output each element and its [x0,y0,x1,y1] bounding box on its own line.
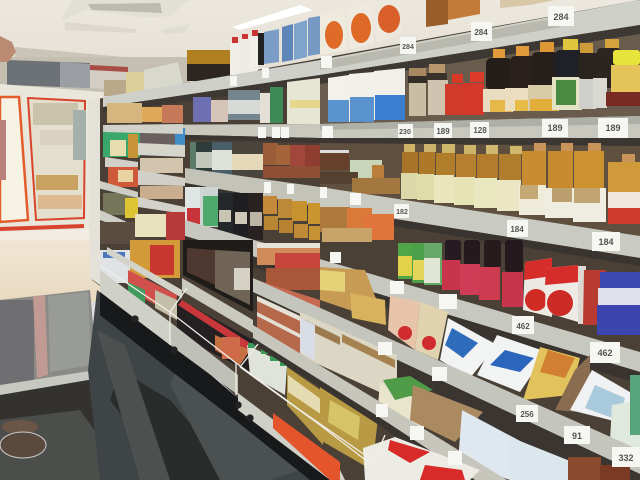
price labels: 230 [399,129,411,136]
wire baskets [100,265,385,465]
price labels: 284 [553,12,569,22]
rice bags [363,437,480,480]
price labels: 189 [547,123,563,133]
price tags [230,6,640,467]
back wall and window [0,36,190,92]
third row products [103,128,640,224]
left basket products [177,298,378,470]
price labels: 184 [510,225,524,234]
fifth row products [100,212,640,450]
price labels: 332 [618,453,634,463]
shelf 5 [107,247,640,480]
top row products [104,0,555,96]
price labels: 184 [598,237,614,247]
sixth row products: tubs and white bottles [257,296,397,400]
price labels: 462 [516,322,530,331]
end cap upright [88,98,100,285]
price labels: 91 [572,431,582,441]
under-shelf dark gap [100,290,345,480]
fourth row products [103,158,640,335]
price labels: 462 [597,348,613,358]
shelf 6 [253,325,520,480]
freezer cabinets [0,84,103,248]
second row products [107,39,640,124]
price labels: 182 [396,209,408,216]
price labels: 284 [402,44,414,51]
shelf 3 [105,124,640,266]
price labels [396,12,634,463]
shelf 4 center [97,170,640,384]
lower base with orange sign [100,270,345,480]
shelf 1 [103,0,640,112]
price labels: 256 [520,410,534,419]
ceiling [0,0,640,130]
price labels: 189 [436,127,450,136]
seventh row products [378,376,630,480]
third row back panel [320,143,640,240]
floor [0,240,345,480]
price labels: 128 [473,126,487,135]
price labels: 189 [605,123,621,133]
shelf 2 [103,116,640,146]
price labels: 284 [474,28,488,37]
second row back panel [320,34,640,125]
